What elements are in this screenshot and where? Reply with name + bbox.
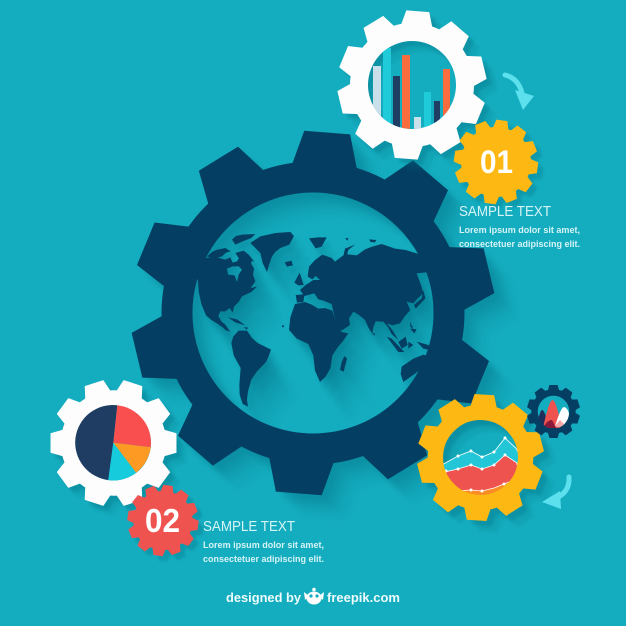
red badge 02: 02 — [145, 502, 180, 539]
world map — [192, 232, 435, 407]
white gear with bar chart — [337, 10, 487, 160]
text block 02: consectetuer adipiscing elit. — [203, 554, 324, 565]
big gear long shadow — [135, 136, 522, 521]
text block 01: SAMPLE TEXT — [459, 204, 551, 220]
icon: freepik mascot — [304, 588, 324, 604]
white gear with pie chart — [33, 363, 194, 523]
area chart — [444, 436, 518, 495]
red badge 02 — [123, 480, 208, 566]
footer credit — [226, 588, 400, 605]
yellow gear with area chart — [417, 394, 544, 521]
yellow badge 01: 01 — [480, 144, 513, 180]
world map shadow — [198, 238, 434, 424]
yellow gear shadow — [418, 396, 560, 536]
bar chart — [373, 48, 450, 130]
arrow bottom — [542, 477, 569, 509]
footer credit: designed by — [226, 590, 302, 605]
text block 01: Lorem ipsum dolor sit amet, — [459, 225, 580, 236]
footer credit: freepik.com — [327, 590, 400, 605]
peaks chart — [538, 400, 569, 428]
text block 01 — [459, 204, 580, 250]
text block 01: consectetuer adipiscing elit. — [459, 239, 580, 250]
small navy gear with peaks chart — [527, 385, 580, 438]
white gear shadow — [336, 10, 504, 176]
arrow top — [505, 75, 534, 110]
text block 02: SAMPLE TEXT — [203, 519, 295, 535]
text block 02 — [203, 519, 324, 565]
text block 02: Lorem ipsum dolor sit amet, — [203, 540, 324, 551]
big navy gear — [129, 130, 497, 496]
white gear shadow left — [38, 368, 203, 533]
pie chart — [75, 405, 151, 480]
yellow badge 01 — [449, 115, 548, 214]
